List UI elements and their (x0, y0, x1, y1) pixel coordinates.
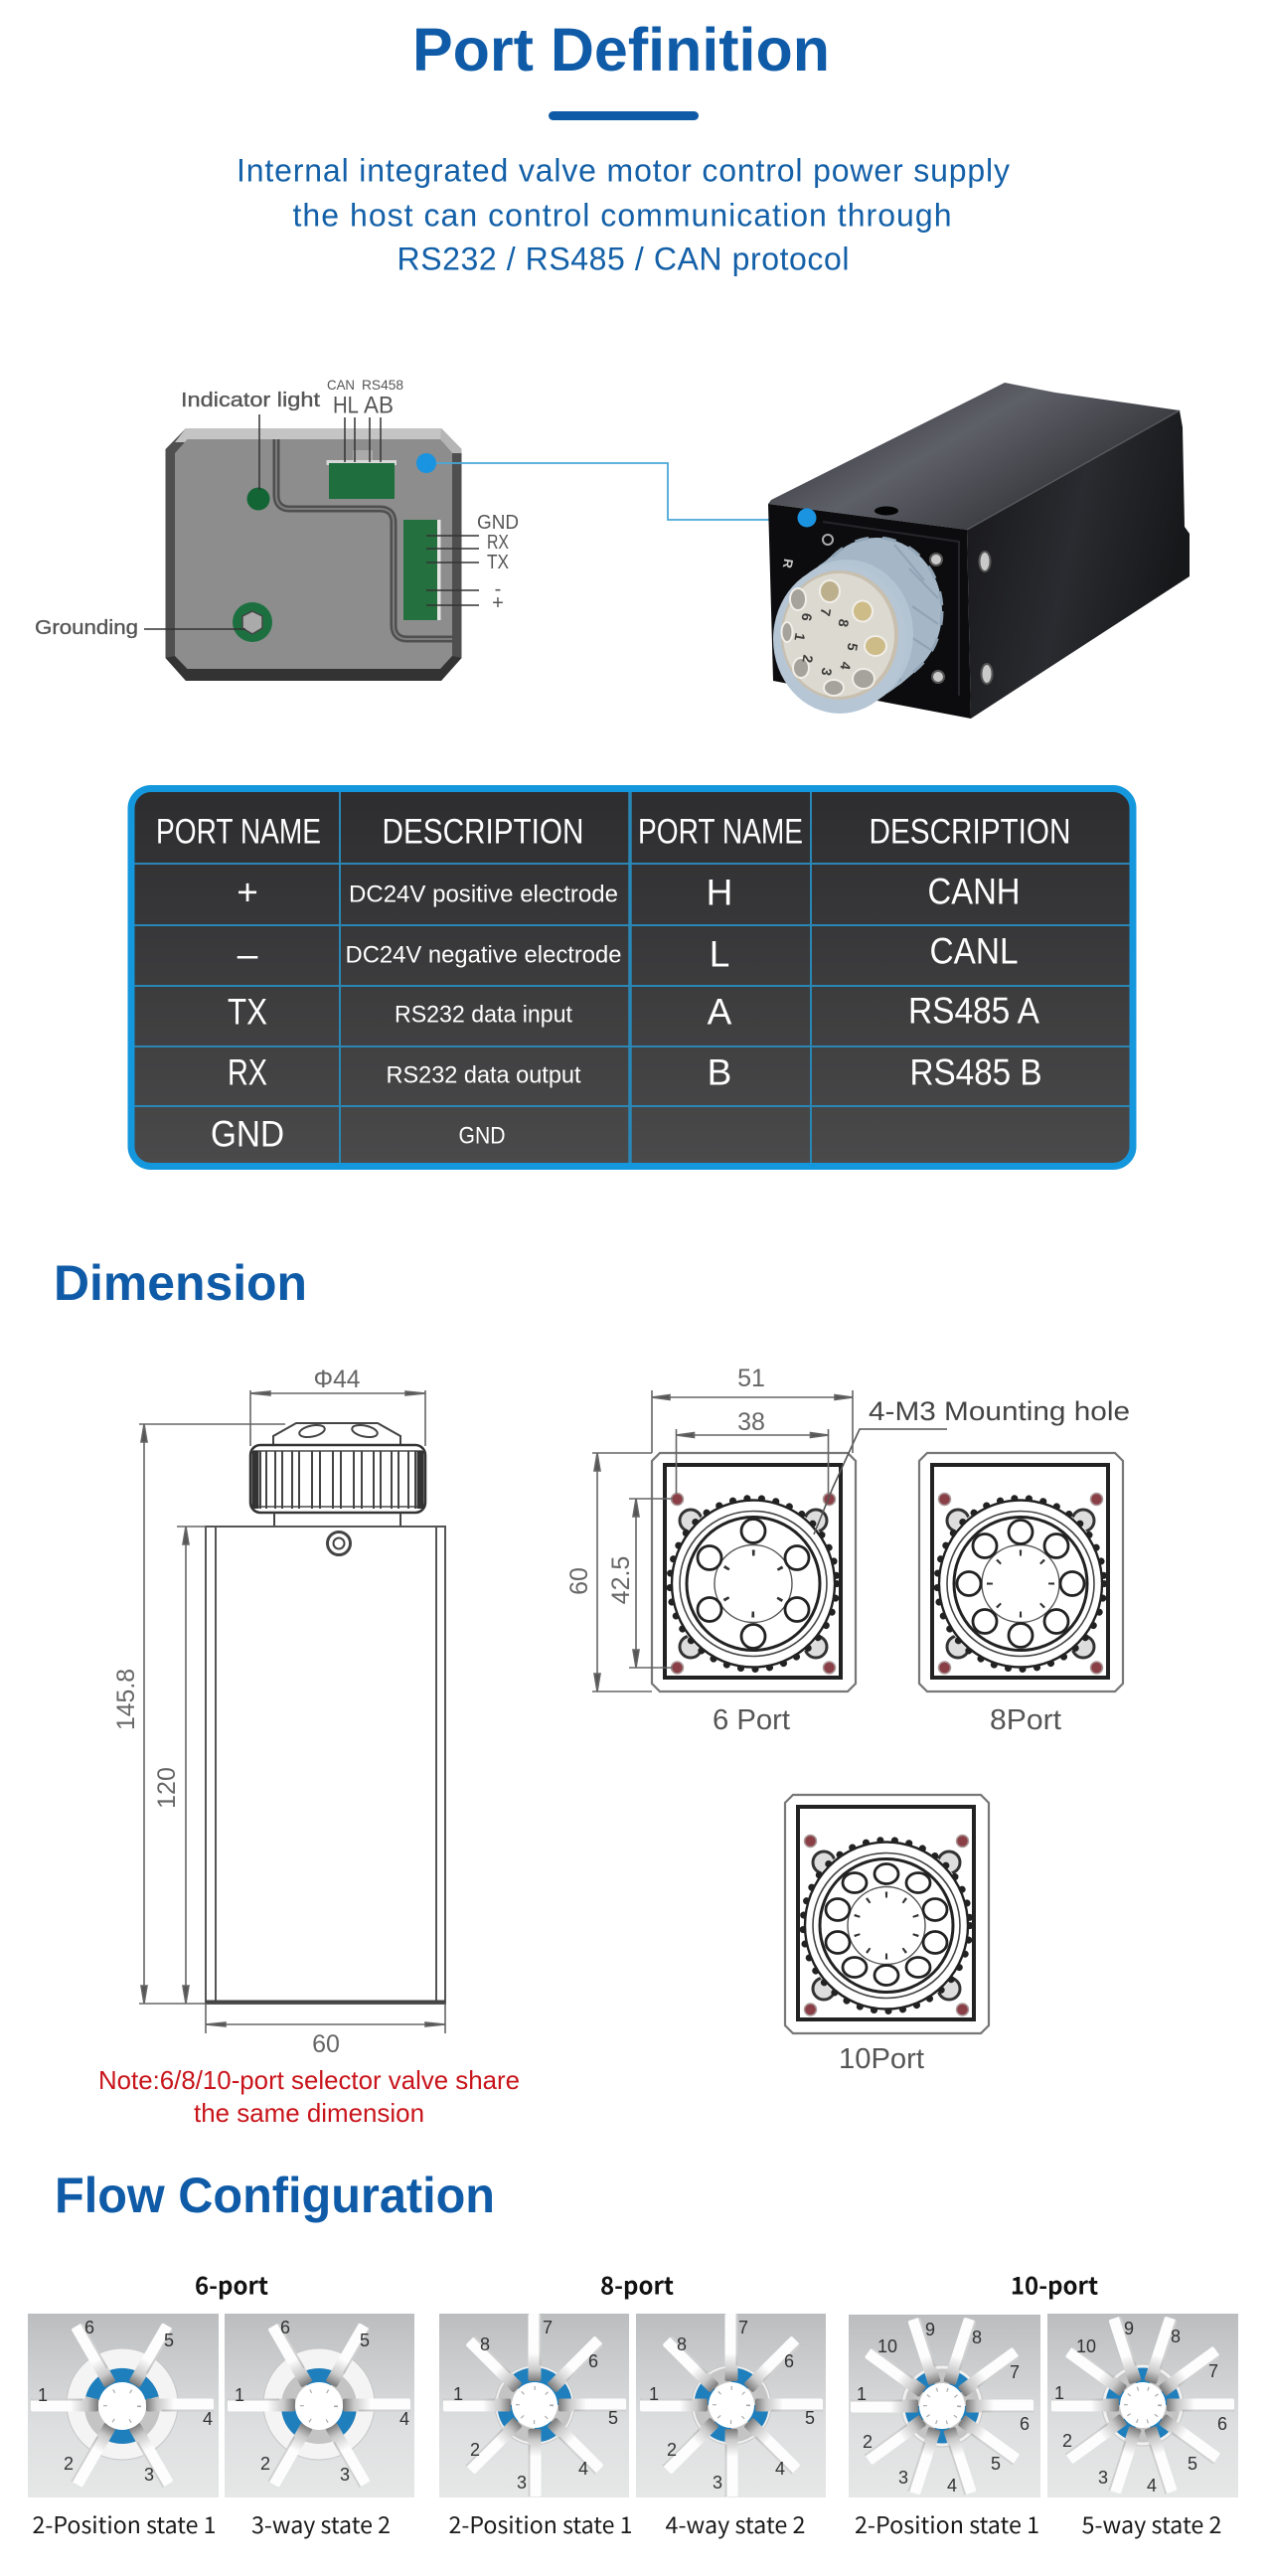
drawing: 6 port front view (565, 1365, 1130, 1736)
table rows: DC24V negative electrode (346, 942, 622, 968)
table rows: RS232 data output (386, 1061, 581, 1089)
labels: serial and power pins: GND (477, 512, 519, 534)
valve: 10-port 2-position state 1: 5 (991, 2454, 1001, 2474)
caption: 8-port state 2: 4-way state 2 (666, 2506, 805, 2540)
valve: 10-port 5-way state 2: 7 (1208, 2361, 1218, 2381)
callout connector (416, 453, 806, 520)
dimension lines (592, 1390, 853, 1691)
valve: 6-port 3-way state 2: 3 (340, 2465, 350, 2485)
valve: 10-port 5-way state 2 (1047, 2314, 1238, 2497)
labels: serial and power pins: RX (487, 532, 509, 554)
table: port definitions (131, 789, 1133, 1167)
subtitle (237, 153, 1010, 276)
valve: 6-port 3-way state 2: 4 (399, 2409, 409, 2429)
mounting hole leader (814, 1429, 947, 1534)
icon: indicator light (246, 487, 270, 511)
dimension: phi 44: Φ44 (314, 1366, 361, 1393)
valve: 8-port 2-position state 1 (439, 2314, 629, 2497)
labels: serial and power pins: - (495, 578, 501, 600)
valve: 10-port 2-position state 1: 4 (947, 2476, 957, 2496)
dimension: 38: 38 (737, 1408, 765, 1436)
table rows: H (707, 873, 732, 912)
caption: 6-port state 1: 2-Position state 1 (32, 2506, 216, 2540)
label: RS458: RS458 (362, 377, 403, 393)
connector leader lines (144, 414, 479, 629)
valve: 8-port 4-way state 2 (636, 2314, 826, 2497)
label: 6 port: 6 Port (713, 1704, 790, 1736)
table rows: A (708, 992, 732, 1032)
valve: 8-port 4-way state 2: 5 (805, 2408, 815, 2428)
table rows: RS232 data input (395, 1002, 572, 1028)
dimension: 51: 51 (737, 1365, 765, 1392)
table rows: GND (459, 1123, 505, 1149)
valve: 10-port 2-position state 1: 2 (863, 2432, 873, 2452)
dimension: 60: 60 (565, 1567, 593, 1595)
valve: 10-port 2-position state 1 (849, 2315, 1040, 2497)
table rows: CANL (930, 930, 1018, 972)
label: grounding: Grounding (35, 617, 138, 639)
knob port numbers: 4 (837, 661, 855, 671)
label: HL: HL (333, 392, 359, 419)
heading: flow configuration: Flow Configuration (55, 2168, 495, 2223)
valve: 6-port 3-way state 2 (225, 2314, 414, 2497)
valve: 8-port 4-way state 2: 1 (649, 2384, 659, 2404)
valve: 6-port 3-way state 2: 1 (235, 2385, 244, 2405)
valve: 10-port 2-position state 1: 10 (877, 2336, 897, 2356)
knob port numbers: 5 (844, 642, 862, 652)
valve: 6-port 2-position state 1: 6 (84, 2318, 94, 2337)
subtitle: RS232 / RS485 / CAN protocol (398, 241, 849, 276)
valve: 8-port 2-position state 1: 7 (543, 2318, 553, 2337)
dimension: 145.8: 145.8 (112, 1669, 140, 1730)
table rows: L (710, 934, 729, 974)
subtitle: Internal integrated valve motor control power supply (237, 153, 1010, 189)
valve: 8-port 4-way state 2: 7 (738, 2318, 748, 2337)
valve: 8-port 2-position state 1: 3 (517, 2473, 527, 2493)
table header: PORT NAME (638, 813, 803, 851)
valve: 10-port 2-position state 1: 6 (1020, 2414, 1030, 2434)
dimension: 60: 60 (312, 2030, 340, 2058)
valve: 8-port 2-position state 1: 1 (453, 2384, 463, 2404)
heading: 6-port: 6-port (195, 2266, 268, 2302)
valve: 8-port 2-position state 1: 2 (470, 2440, 480, 2460)
table header: DESCRIPTION (382, 813, 584, 851)
caption: 10-port state 1: 2-Position state 1 (855, 2506, 1039, 2540)
valve: 10-port 5-way state 2: 2 (1062, 2431, 1072, 2451)
labels: serial and power pins: TX (487, 552, 509, 573)
heading: 8-port: 8-port (600, 2266, 674, 2302)
valve: 6-port 3-way state 2: 6 (280, 2318, 290, 2337)
knob body (773, 538, 942, 714)
valve: 6-port 2-position state 1: 5 (164, 2331, 174, 2350)
valve: 10-port 5-way state 2: 5 (1188, 2454, 1197, 2474)
knob ports (781, 580, 886, 696)
icon: side and front screws (930, 552, 992, 684)
table rows: RX (228, 1051, 267, 1093)
note (98, 2065, 520, 2128)
heading: 10-port: 10-port (1011, 2266, 1098, 2302)
valve: 6-port 2-position state 1: 3 (144, 2465, 154, 2485)
subtitle: the host can control communication through (292, 197, 952, 233)
panel: board port diagram (35, 377, 519, 681)
knob outline (250, 1423, 425, 1527)
caption: 10-port state 2: 5-way state 2 (1081, 2506, 1222, 2540)
valve: 10-port 5-way state 2: 4 (1147, 2476, 1157, 2496)
callout dot on product (797, 509, 817, 527)
valve: 8-port 4-way state 2: 8 (677, 2334, 687, 2354)
mark: panel ring and letter: R (780, 558, 796, 570)
label: CAN: CAN (327, 377, 355, 393)
table rows: + (237, 873, 258, 912)
labels: serial and power pins: + (492, 592, 504, 614)
panel: valve product photo (768, 383, 1190, 719)
table rows (211, 871, 1041, 1155)
valve: 10-port 5-way state 2: 1 (1054, 2383, 1064, 2403)
label: mounting hole: 4-M3 Mounting hole (869, 1396, 1130, 1426)
knob port numbers: 7 (817, 607, 835, 617)
table header: DESCRIPTION (869, 813, 1071, 851)
valve: 8-port 4-way state 2: 3 (713, 2473, 722, 2493)
caption: 6-port state 2: 3-way state 2 (251, 2506, 391, 2540)
valve: 10-port 2-position state 1: 1 (857, 2384, 867, 2404)
valve: 8-port 2-position state 1: 6 (588, 2351, 598, 2371)
label: 10 port: 10Port (839, 2043, 924, 2075)
valve: 10-port 2-position state 1: 8 (972, 2328, 982, 2347)
table rows: DC24V positive electrode (349, 881, 618, 908)
table rows: RS485 B (910, 1051, 1041, 1093)
label: indicator light: Indicator light (181, 390, 321, 411)
valve: 10-port 2-position state 1: 7 (1010, 2362, 1020, 2382)
label: AB: AB (364, 392, 394, 419)
valve: 10-port 2-position state 1: 3 (898, 2468, 908, 2488)
labels: serial and power pins (477, 512, 519, 614)
valve: 10-port 5-way state 2: 8 (1171, 2327, 1181, 2346)
valve: 6-port 2-position state 1 (28, 2314, 219, 2497)
table rows: TX (228, 992, 267, 1032)
valve: 10-port 5-way state 2: 10 (1076, 2336, 1096, 2356)
valve: 6-port 2-position state 1: 2 (64, 2454, 74, 2474)
knob port numbers (791, 607, 862, 677)
table rows: CANH (928, 871, 1020, 912)
table rows: RS485 A (908, 990, 1039, 1032)
table rows: GND (211, 1113, 284, 1155)
connector: power and RS232 (403, 520, 441, 620)
valve: 6-port 3-way state 2: 2 (260, 2454, 270, 2474)
title underline (549, 111, 699, 120)
dimension lines (139, 1390, 445, 2033)
table header: PORT NAME (156, 813, 321, 851)
drawing: 8 port front view (919, 1453, 1123, 1736)
valve: 8-port 2-position state 1: 8 (480, 2334, 490, 2354)
title: Port Definition (412, 16, 830, 83)
knob port numbers: 1 (791, 632, 809, 642)
valve: 10-port 5-way state 2: 3 (1098, 2468, 1108, 2488)
knob port numbers: 8 (835, 618, 853, 628)
knob port numbers: 3 (818, 667, 836, 677)
valve: 8-port 2-position state 1: 4 (578, 2459, 588, 2479)
valve: 10-port 5-way state 2: 9 (1124, 2319, 1134, 2338)
valve: 10-port 2-position state 1: 9 (925, 2320, 935, 2339)
note: the same dimension (194, 2098, 424, 2128)
valve: 8-port 2-position state 1: 5 (608, 2408, 618, 2428)
note: Note:6/8/10-port selector valve share (98, 2065, 520, 2095)
icon: body screw (328, 1532, 350, 1554)
dimension: 120: 120 (153, 1767, 181, 1809)
valve: 10-port 5-way state 2: 6 (1217, 2414, 1227, 2434)
knob port numbers: 6 (798, 612, 816, 622)
label: 8 port: 8Port (990, 1704, 1061, 1736)
valve body (206, 1527, 445, 2004)
valve: 6-port 2-position state 1: 1 (38, 2385, 48, 2405)
connector: CAN and RS485 (326, 450, 397, 499)
valve: 6-port 2-position state 1: 4 (203, 2409, 213, 2429)
icon: grounding screw (233, 602, 272, 642)
drawing: side view (112, 1366, 445, 2058)
drawing: 10 port front view (785, 1795, 989, 2075)
caption: 8-port state 1: 2-Position state 1 (449, 2506, 632, 2540)
table rows: – (238, 934, 258, 974)
dimension: 42.5: 42.5 (607, 1556, 635, 1604)
valve: 8-port 4-way state 2: 6 (784, 2351, 794, 2371)
valve: 8-port 4-way state 2: 4 (775, 2459, 785, 2479)
table header (156, 813, 1071, 851)
mark: panel ring and letter (780, 535, 833, 570)
knob port numbers: 2 (799, 654, 817, 664)
valve: 8-port 4-way state 2: 2 (667, 2440, 677, 2460)
heading: dimension: Dimension (54, 1255, 307, 1311)
valve: 6-port 3-way state 2: 5 (360, 2331, 370, 2350)
table rows: B (708, 1051, 731, 1093)
